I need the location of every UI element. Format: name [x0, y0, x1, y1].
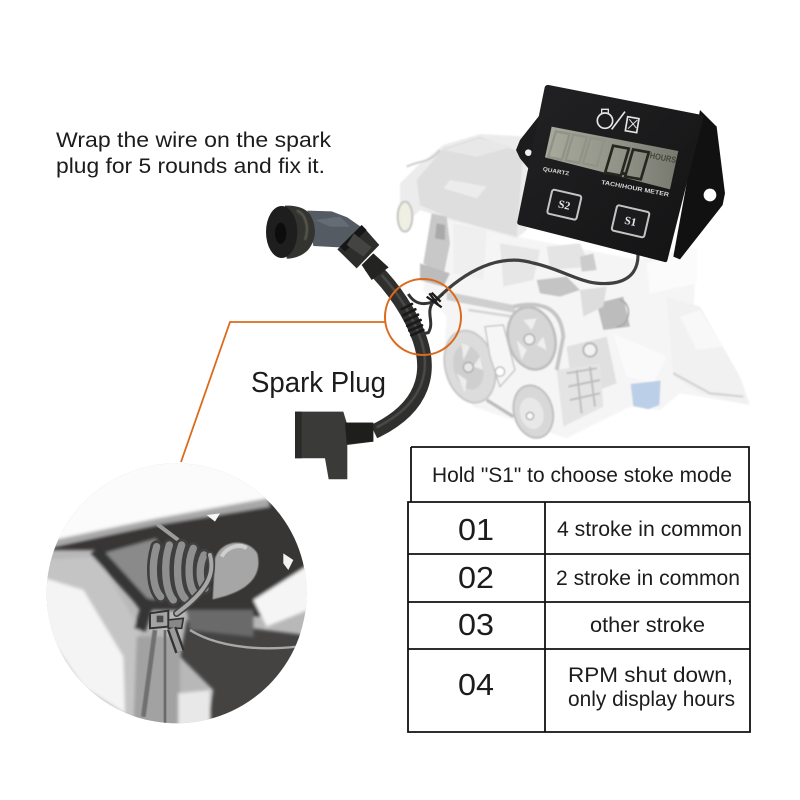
engine illustration	[398, 134, 750, 442]
wrapped coil	[402, 304, 423, 335]
S2 button: S2	[557, 198, 572, 213]
row 04: RPM shut down,	[568, 664, 733, 687]
tach hour meter	[516, 85, 725, 262]
boot sleeve	[337, 225, 379, 268]
faded LCD digits	[548, 131, 604, 167]
TACH/HOUR METER label: TACH/HOUR METER	[601, 180, 670, 199]
HOURS label: HOURS	[649, 150, 677, 165]
S1 button	[611, 205, 650, 238]
row 02: 2 stroke in common	[556, 567, 740, 590]
row 03	[458, 607, 705, 642]
installation note: plug for 5 rounds and fix it.	[56, 154, 325, 178]
boot opening	[266, 206, 297, 258]
row 04: only display hours	[568, 688, 735, 711]
left mounting flange	[516, 108, 545, 168]
meter face	[517, 85, 703, 262]
stroke mode table	[408, 447, 750, 732]
right mounting flange	[673, 110, 725, 259]
oil filter	[631, 381, 661, 409]
S1 button: S1	[623, 215, 638, 229]
callout leader line	[181, 322, 385, 462]
S2 button	[547, 189, 582, 220]
QUARTZ label: QUARTZ	[542, 167, 570, 178]
boot collar	[285, 206, 315, 259]
row 01: 4 stroke in common	[557, 518, 742, 541]
cable tie	[143, 611, 183, 723]
Spark Plug label: Spark Plug	[251, 367, 386, 399]
cable	[370, 265, 424, 432]
pulleys	[437, 302, 597, 442]
table heading: Hold "S1" to choose stoke mode	[432, 464, 732, 487]
row 01: 01	[458, 512, 494, 547]
wire tie	[427, 293, 442, 307]
row 03: other stroke	[590, 614, 705, 637]
installation note: Wrap the wire on the spark	[56, 128, 331, 152]
LCD reading 0.0	[605, 145, 649, 180]
LCD screen	[545, 127, 678, 189]
plug connector	[295, 412, 373, 479]
thin loop wire	[408, 294, 433, 334]
installation note	[56, 128, 331, 178]
callout circle	[385, 279, 461, 355]
row 02	[458, 560, 740, 595]
mode icons	[597, 109, 639, 133]
small detail	[190, 630, 297, 648]
gauge cable	[436, 255, 638, 300]
close-up photo	[46, 463, 307, 724]
table frame	[408, 447, 750, 732]
wire coil	[153, 525, 211, 613]
row 04	[458, 664, 735, 711]
row 03: 03	[458, 607, 494, 642]
row 04: 04	[458, 667, 494, 702]
row 01	[458, 512, 742, 547]
spark plug cable assembly	[266, 206, 443, 479]
row 02: 02	[458, 560, 494, 595]
hose	[213, 543, 258, 599]
boot elbow	[307, 211, 362, 247]
